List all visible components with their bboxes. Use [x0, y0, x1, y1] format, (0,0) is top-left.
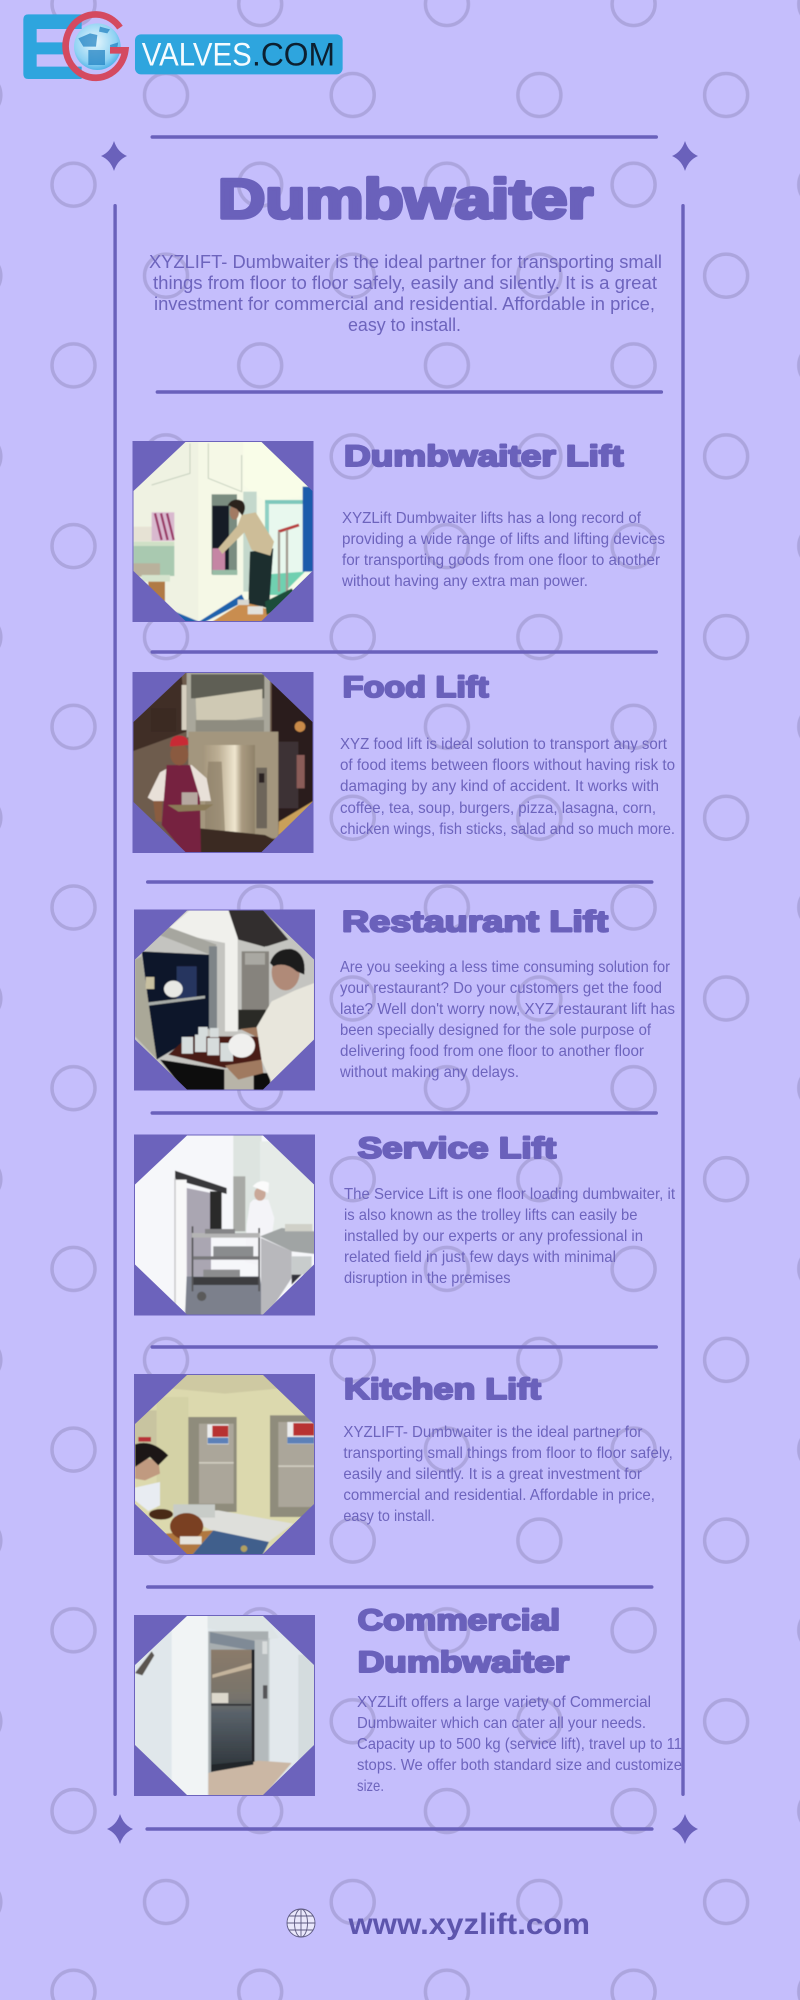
body text: commercial and residential. Affordable in price,: [343, 1487, 655, 1504]
body text: disruption in the premises: [344, 1270, 510, 1287]
body text: XYZLift Dumbwaiter lifts has a long record of: [342, 510, 642, 527]
panel: restaurant lift: [134, 909, 674, 1090]
frame: bottom right star: [672, 1814, 698, 1844]
body text: The Service Lift is one floor loading dumbwaiter, it: [344, 1186, 676, 1203]
body text: related field in just few days with minimal: [344, 1249, 616, 1266]
heading: Dumbwaiter Lift: [344, 440, 624, 473]
intro paragraph: investment for commercial and residential. Affordable in price,: [154, 294, 655, 314]
body text: your restaurant? Do your customers get the food: [340, 980, 662, 997]
body text: Capacity up to 500 kg (service lift), travel up to 11: [357, 1736, 682, 1753]
panel: commercial dumbwaiter: [125, 1604, 682, 1808]
frame: bottom left star: [107, 1814, 133, 1844]
body text: without making any delays.: [339, 1064, 519, 1081]
body text: is also known as the trolley lifts can easily be: [344, 1207, 638, 1224]
heading: Kitchen Lift: [344, 1373, 541, 1406]
logo: EG Valves: [23, 14, 343, 79]
panel: food lift: [132, 672, 674, 853]
logo text: valves: VALVES: [142, 37, 252, 73]
intro paragraph: [149, 252, 662, 335]
logo text: dot com: .COM: [252, 37, 335, 73]
logo graphic: [23, 14, 343, 79]
body text: stops. We offer both standard size and customize: [357, 1757, 682, 1774]
icon: globe: [287, 1909, 315, 1937]
photo: kitchen lift doors: [134, 1374, 315, 1555]
heading: Service Lift: [358, 1132, 556, 1165]
photo: commercial lift door: [134, 1615, 315, 1796]
body text: Are you seeking a less time consuming solution for: [340, 959, 671, 976]
body text: XYZLIFT- Dumbwaiter is the ideal partner for: [343, 1424, 643, 1441]
body text: transporting small things from floor to floor safely,: [343, 1445, 673, 1462]
body text: of food items between floors without having risk to: [340, 757, 675, 774]
panel: dumbwaiter lift: [132, 441, 664, 622]
body text: easy to install.: [343, 1508, 435, 1525]
frame: right line: [681, 204, 685, 1796]
body text: delivering food from one floor to another floor: [340, 1043, 645, 1060]
intro paragraph: XYZLIFT- Dumbwaiter is the ideal partner for transporting small: [149, 252, 662, 272]
heading: Dumbwaiter: [358, 1646, 569, 1679]
photo: man loading dumbwaiter: [132, 441, 314, 622]
photo: service lift with trolley: [134, 1134, 315, 1316]
frame: top line: [150, 135, 658, 139]
body text: coffee, tea, soup, burgers, pizza, lasagna, corn,: [340, 800, 656, 817]
body text: late? Well don't worry now, XYZ restaurant lift has: [340, 1001, 675, 1018]
body text: been specially designed for the sole purpose of: [340, 1022, 652, 1039]
body text: providing a wide range of lifts and lifting devices: [342, 531, 665, 548]
body text: XYZLift offers a large variety of Commercial: [357, 1694, 651, 1711]
body text: [339, 959, 675, 1081]
body text: [340, 736, 675, 838]
panel: kitchen lift: [134, 1374, 672, 1555]
body text: without having any extra man power.: [341, 573, 588, 590]
body text: damaging by any kind of accident. It works with: [340, 778, 659, 795]
heading: Food Lift: [343, 671, 489, 704]
body text: [344, 1186, 676, 1287]
frame: bottom line: [145, 1827, 654, 1831]
body text: easily and silently. It is a great investment for: [343, 1466, 643, 1483]
frame: top right star: [672, 141, 698, 171]
panel: service lift: [134, 1134, 675, 1316]
photo: chef with glasses at lift: [134, 910, 315, 1090]
body text: [341, 510, 665, 590]
intro paragraph: things from floor to floor safely, easily and silently. It is a great: [153, 273, 657, 293]
heading: [358, 1604, 569, 1679]
intro paragraph: easy to install.: [348, 315, 461, 335]
website url: www.xyzlift.com: [347, 1908, 590, 1941]
heading: Restaurant Lift: [342, 906, 608, 938]
photo: chef with food lift: [132, 672, 314, 853]
body text: [343, 1424, 673, 1525]
body text: installed by our experts or any professional in: [344, 1228, 643, 1245]
body text: Dumbwaiter which can cater all your needs.: [357, 1715, 646, 1732]
frame: top left star: [101, 141, 127, 171]
heading: Commercial: [358, 1604, 560, 1637]
body text: [357, 1694, 682, 1795]
body text: chicken wings, fish sticks, salad and so much more.: [340, 821, 675, 838]
title: Dumbwaiter: [218, 167, 593, 230]
frame: left line: [113, 204, 117, 1796]
body text: XYZ food lift is ideal solution to transport any sort: [340, 736, 668, 753]
body text: size.: [357, 1778, 384, 1795]
body text: for transporting goods from one floor to another: [342, 552, 661, 569]
